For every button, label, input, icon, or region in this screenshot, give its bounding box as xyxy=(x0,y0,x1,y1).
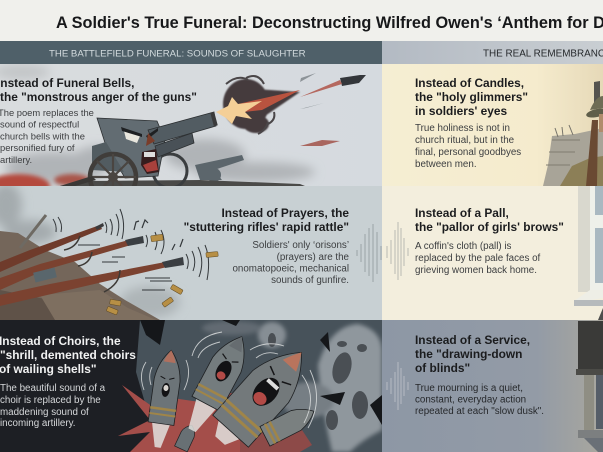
text: pall xyxy=(415,206,564,276)
panel: choirs xyxy=(0,320,382,452)
dark ground xyxy=(60,180,305,186)
text: service: Instead of a Service, xyxy=(415,333,530,347)
text: pall: the "pallor of girls' brows" xyxy=(415,220,564,234)
text: service: repeated at each "slow dusk". xyxy=(415,406,544,417)
icon: waveform xyxy=(357,224,381,282)
text: prayers xyxy=(184,206,350,286)
icon: shell 4 xyxy=(260,409,314,447)
text: funeral bells: Instead of Funeral Bells, xyxy=(0,76,134,90)
icon: brass casings xyxy=(106,234,218,315)
text: candles: final, personal goodbyes xyxy=(415,147,521,158)
text: pall: A coffin's cloth (pall) is xyxy=(415,241,512,252)
icon: shell small xyxy=(174,425,195,452)
text: prayers: (prayers) are the xyxy=(277,252,350,263)
text: funeral bells: artillery. xyxy=(0,154,32,165)
panel: prayers xyxy=(0,183,382,320)
text: candles: True holiness is not in xyxy=(415,123,510,134)
ghost face xyxy=(268,333,368,430)
icon: shell 1 xyxy=(148,350,180,448)
header: battlefield funeral xyxy=(0,41,382,64)
red burst xyxy=(118,385,240,452)
title: A Soldier's True Funeral: Deconstructing Wilfred Owen's ‘Anthem for D xyxy=(56,14,603,32)
icon: sound rings xyxy=(141,332,317,428)
ghost smoke xyxy=(202,321,382,452)
icon: waveform xyxy=(387,362,408,410)
panel: pall xyxy=(382,186,603,320)
text: candles: the "holy glimmers" xyxy=(415,90,528,104)
header: real remembrance: THE REAL REMEMBRANC xyxy=(483,48,603,60)
fire on the ground xyxy=(0,171,88,186)
icon: waveform xyxy=(387,222,408,280)
text: candles: in soldiers' eyes xyxy=(415,104,507,118)
text: candles: between men. xyxy=(415,159,477,170)
text: service: of blinds" xyxy=(415,361,470,375)
trench mound xyxy=(0,231,160,320)
text: prayers: Soldiers' only ‘orisons’ xyxy=(252,240,349,251)
text: funeral bells: sound of respectful xyxy=(0,118,79,130)
shards xyxy=(140,320,382,425)
icon: muzzle smoke xyxy=(223,79,300,133)
icon: window with drawn blind xyxy=(576,321,603,452)
text: pall: Instead of a Pall, xyxy=(415,206,509,220)
text: funeral bells: personified fury of xyxy=(0,142,75,153)
icon: muzzle flash xyxy=(238,90,300,112)
text: candles: church ritual, but in the xyxy=(415,135,515,146)
text: choirs: "shrill, demented choirs xyxy=(0,348,136,362)
text: candles: Instead of Candles, xyxy=(415,76,524,90)
panel: candles xyxy=(382,64,603,186)
distant gun silhouette xyxy=(195,155,244,182)
shattered backdrop xyxy=(136,320,382,452)
text: funeral bells: the "monstrous anger of the guns" xyxy=(0,90,197,104)
smoke clouds xyxy=(0,183,180,318)
panel: funeral bells xyxy=(0,64,382,186)
text: service: True mourning is a quiet, xyxy=(415,383,523,394)
text: pall: grieving women back home. xyxy=(415,265,537,276)
text: prayers: Instead of Prayers, the xyxy=(221,206,349,220)
icon: angry cannon xyxy=(60,112,218,186)
icon: shell 3 xyxy=(212,352,302,448)
text: funeral bells: The poem replaces the xyxy=(0,107,94,118)
text: candles xyxy=(415,76,528,170)
panel: service xyxy=(382,320,603,452)
text: prayers: sounds of gunfire. xyxy=(271,275,349,286)
text: prayers: onomatopoeic, mechanical xyxy=(232,264,349,274)
icon: shell 2 xyxy=(188,336,244,432)
text: service xyxy=(415,333,544,417)
icon: window xyxy=(574,186,603,320)
icon: soldier xyxy=(560,81,603,186)
text: funeral bells xyxy=(0,76,197,165)
text: service: the "drawing-down xyxy=(415,347,522,361)
text: pall: replaced by the pale faces of xyxy=(415,253,541,264)
smoke clouds xyxy=(0,64,315,184)
icon: sandbag trench xyxy=(543,125,603,186)
text: prayers: "stuttering rifles' rapid rattle" xyxy=(184,220,349,234)
text: funeral bells: church bells with the xyxy=(0,130,85,142)
icon: sound waves xyxy=(53,209,209,290)
header: battlefield funeral: THE BATTLEFIELD FUNERAL: SOUNDS OF SLAUGHTER xyxy=(49,48,306,60)
text: choirs: maddening sound of xyxy=(0,407,89,418)
text: choirs xyxy=(0,334,136,429)
icon: shell in flight xyxy=(300,73,366,146)
text: choirs: choir is replaced by the xyxy=(0,395,101,406)
text: choirs: Instead of Choirs, the xyxy=(0,334,121,348)
icon: rifles xyxy=(0,215,184,306)
text: choirs: The beautiful sound of a xyxy=(0,383,106,394)
text: choirs: of wailing shells" xyxy=(0,362,96,376)
text: choirs: incoming artillery. xyxy=(0,418,76,429)
header: real remembrance xyxy=(382,41,603,64)
text: service: constant, everyday action xyxy=(415,394,526,406)
